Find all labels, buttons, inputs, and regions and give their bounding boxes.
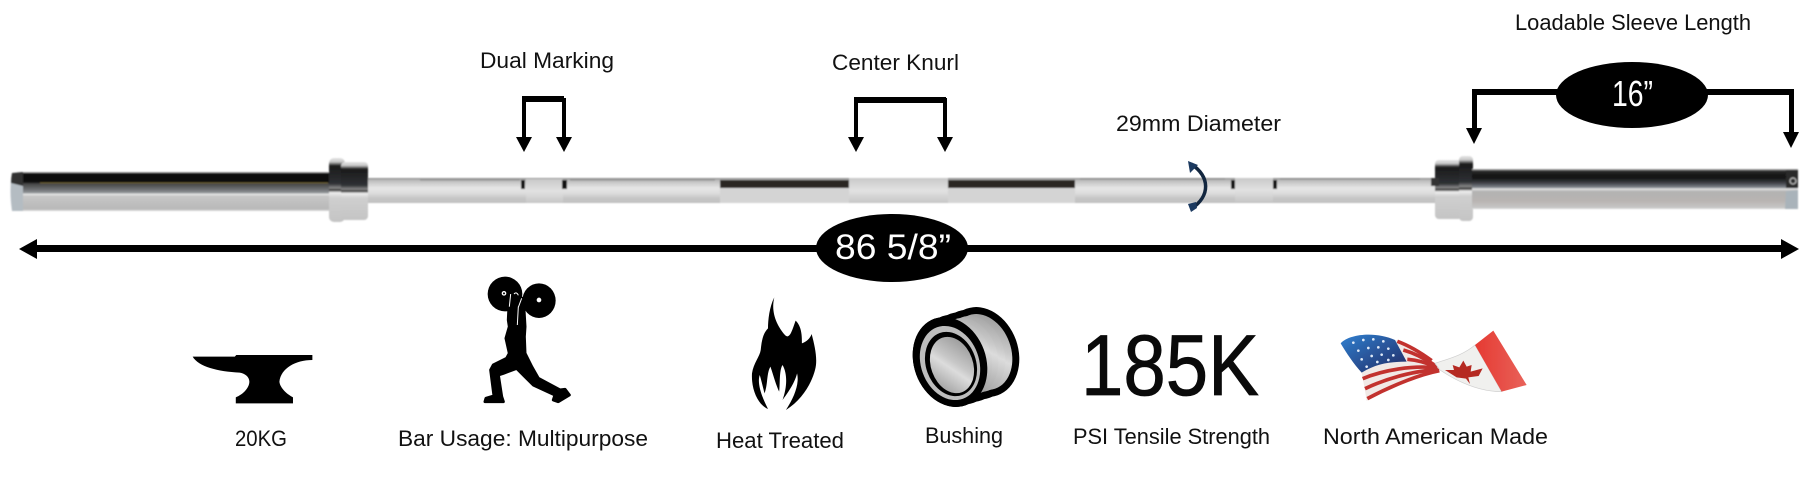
badge: 86 5/8 inch: 86 5/8” xyxy=(835,228,951,267)
label: loadable sleeve length: Loadable Sleeve Length xyxy=(1515,10,1751,35)
icon: weightlifter xyxy=(485,277,569,402)
icon: US and Canada flags xyxy=(1341,331,1527,401)
icon: rotation arrow xyxy=(1188,161,1206,212)
left collar xyxy=(329,158,368,222)
arrow: sleeve length bracket xyxy=(1466,89,1799,148)
icon: flame xyxy=(752,297,816,410)
stat: 185K: 185K xyxy=(1081,318,1259,414)
badge: 86 5/8 inch xyxy=(816,214,968,282)
label: bushing: Bushing xyxy=(925,423,1003,448)
label: north american made: North American Made xyxy=(1323,424,1548,449)
arrow: dual marking bracket xyxy=(516,96,572,152)
label: weight: 20KG xyxy=(235,426,287,451)
badge: 16 inch: 16” xyxy=(1612,73,1653,114)
label: diameter: 29mm Diameter xyxy=(1116,111,1281,136)
label: bar usage: Bar Usage: Multipurpose xyxy=(398,426,648,451)
badge: 16 inch xyxy=(1556,62,1708,128)
label: center knurl: Center Knurl xyxy=(832,50,959,75)
arrow: center knurl bracket xyxy=(848,97,953,152)
arrow: overall length xyxy=(19,239,1799,259)
left sleeve xyxy=(10,172,331,211)
label: heat treated: Heat Treated xyxy=(716,428,844,453)
label: dual marking: Dual Marking xyxy=(480,48,614,73)
right sleeve xyxy=(1472,169,1798,209)
icon: bushing xyxy=(900,296,1032,418)
right collar xyxy=(1431,156,1473,221)
barbell xyxy=(10,156,1798,222)
label: tensile strength: PSI Tensile Strength xyxy=(1073,424,1270,449)
icon: anvil xyxy=(193,355,312,403)
